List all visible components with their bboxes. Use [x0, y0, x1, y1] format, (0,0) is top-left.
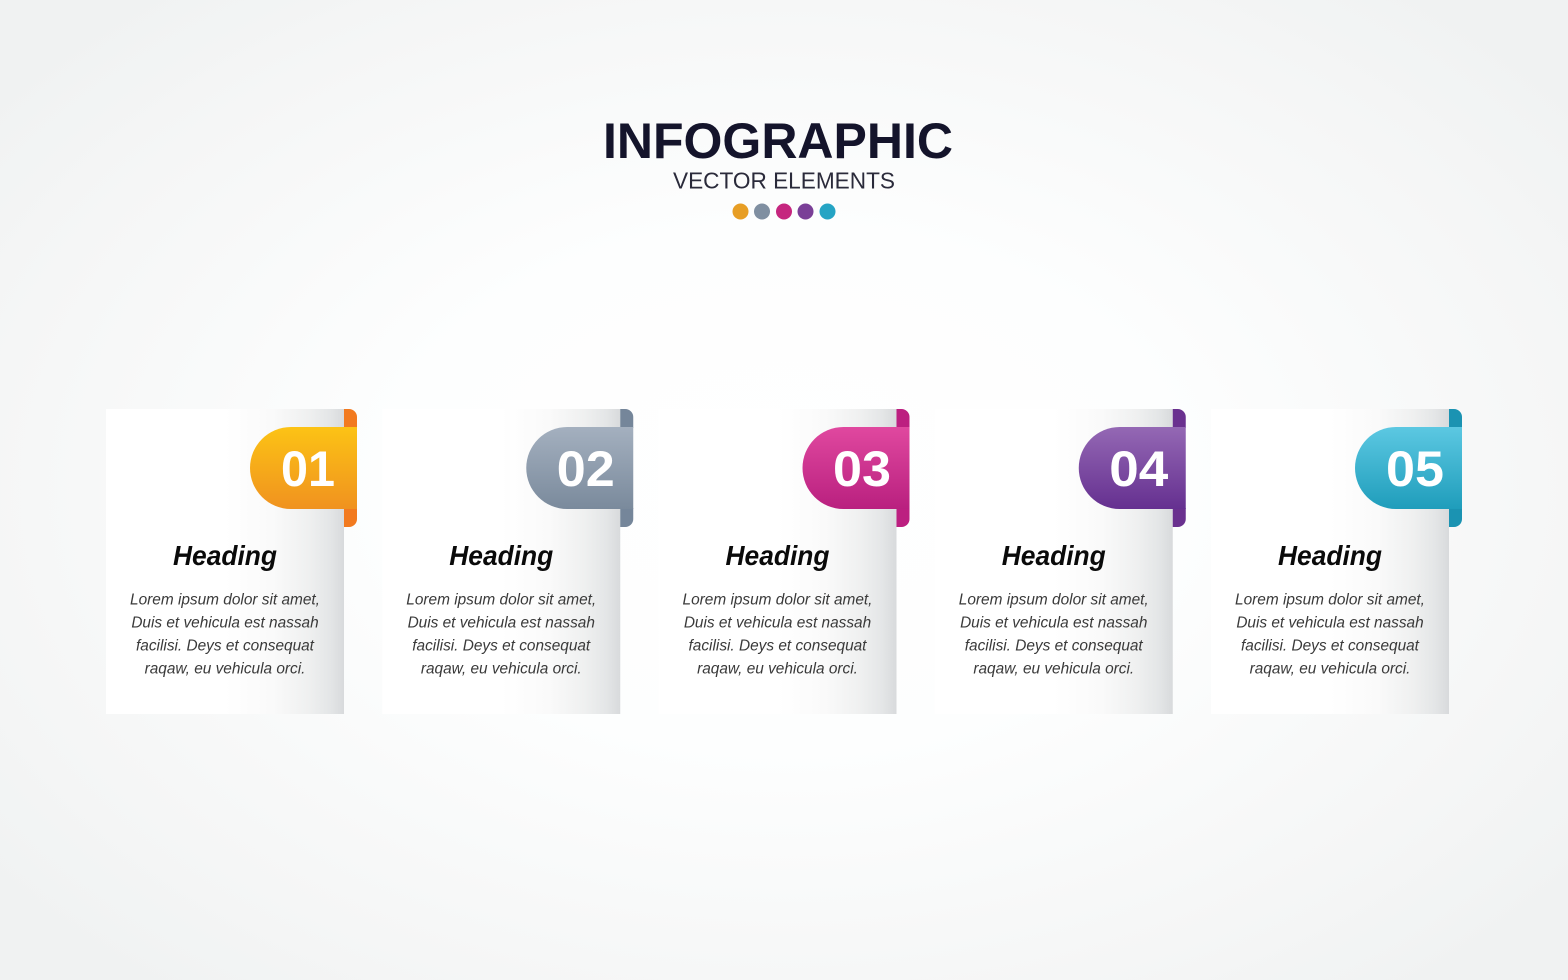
card: [106, 409, 344, 714]
number tab: [1355, 427, 1462, 509]
number: 03: [833, 441, 891, 497]
number: 05: [1386, 441, 1444, 497]
fold: bottom: [1173, 508, 1186, 527]
heading: Heading: [1278, 540, 1382, 571]
body text: facilisi. Deys et consequat: [1241, 638, 1420, 654]
heading: Heading: [449, 540, 553, 571]
fold: top: [896, 409, 910, 428]
body text: Duis et vehicula est nassah: [684, 614, 871, 632]
panel: step 01: [106, 409, 357, 714]
fold: bottom: [620, 508, 633, 527]
heading: Heading: [726, 540, 830, 571]
body text: Lorem ipsum dolor sit amet,: [406, 592, 596, 608]
heading: Heading: [173, 540, 277, 571]
number tab: [250, 427, 357, 509]
number: 01: [281, 441, 335, 497]
body text: raqaw, eu vehicula orci.: [697, 660, 858, 678]
panel: step 05: [1211, 409, 1462, 714]
title: INFOGRAPHIC: [603, 113, 953, 169]
body text: raqaw, eu vehicula orci.: [1250, 660, 1410, 678]
body text: [959, 592, 1149, 678]
fold: bottom: [896, 508, 910, 527]
body text: facilisi. Deys et consequat: [136, 638, 315, 654]
heading: Heading: [1002, 540, 1106, 571]
body text: Duis et vehicula est nassah: [960, 614, 1147, 632]
fold: top: [1449, 409, 1462, 428]
body text: facilisi. Deys et consequat: [965, 638, 1143, 654]
number: 02: [557, 441, 615, 497]
colour dots: [732, 204, 836, 220]
body text: facilisi. Deys et consequat: [412, 638, 591, 654]
number tab: [802, 427, 910, 509]
body text: Duis et vehicula est nassah: [1236, 614, 1424, 632]
body text: [683, 592, 872, 678]
title block: [603, 113, 953, 220]
number tab: [526, 427, 633, 509]
fold: top: [1173, 409, 1186, 428]
body text: Lorem ipsum dolor sit amet,: [959, 592, 1149, 608]
card: [935, 409, 1173, 714]
body text: raqaw, eu vehicula orci.: [145, 660, 305, 678]
body text: Lorem ipsum dolor sit amet,: [683, 592, 872, 608]
fold: bottom: [344, 508, 357, 527]
card: [382, 409, 620, 714]
fold: top: [344, 409, 357, 428]
panel: step 04: [935, 409, 1186, 714]
body text: Duis et vehicula est nassah: [131, 614, 319, 632]
body text: facilisi. Deys et consequat: [689, 638, 867, 654]
card: [658, 409, 896, 714]
body text: Duis et vehicula est nassah: [408, 614, 595, 632]
card: [1211, 409, 1449, 714]
body text: raqaw, eu vehicula orci.: [421, 660, 582, 678]
body text: raqaw, eu vehicula orci.: [973, 660, 1134, 678]
panel: step 02: [382, 409, 633, 714]
subtitle: VECTOR ELEMENTS: [673, 168, 895, 194]
body text: [1235, 592, 1425, 678]
body text: [130, 592, 320, 678]
body text: Lorem ipsum dolor sit amet,: [130, 592, 320, 608]
body text: Lorem ipsum dolor sit amet,: [1235, 592, 1425, 608]
number tab: [1079, 427, 1186, 509]
fold: top: [620, 409, 633, 428]
number: 04: [1109, 441, 1168, 497]
body text: [406, 592, 596, 678]
fold: bottom: [1449, 508, 1462, 527]
panel: step 03: [658, 409, 910, 714]
